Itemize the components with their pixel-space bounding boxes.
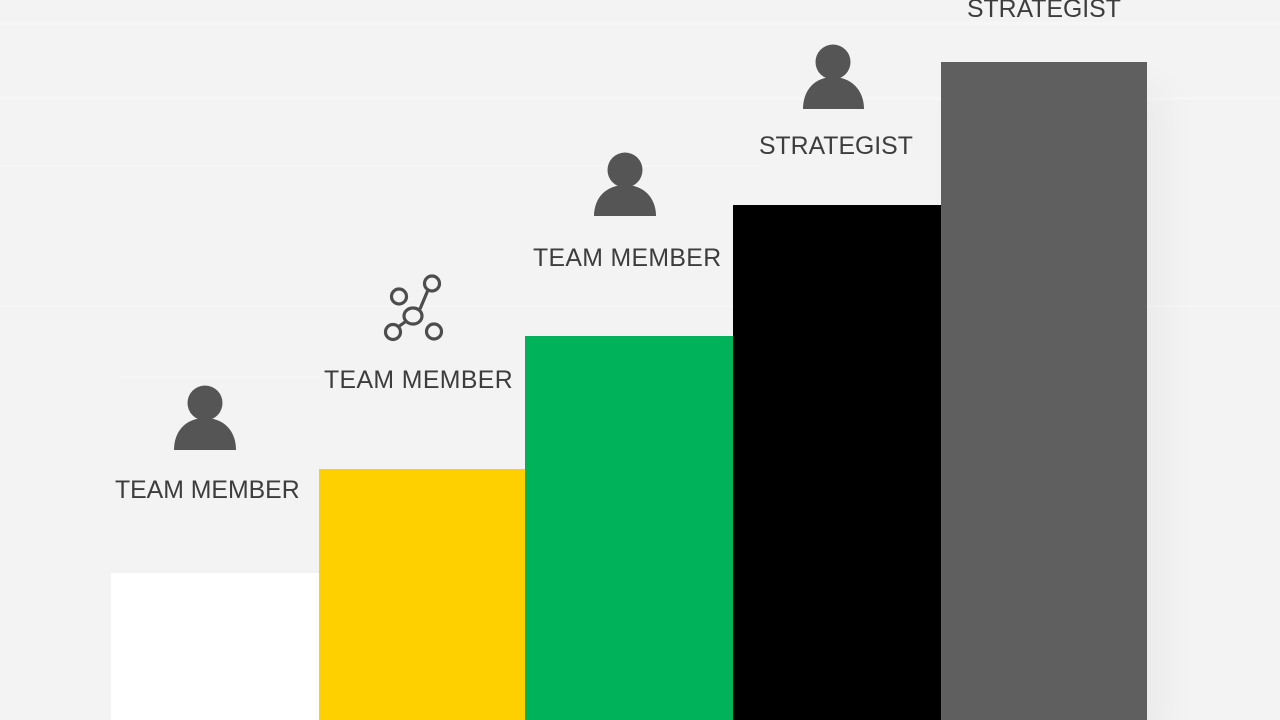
bar 4: black (733, 205, 941, 720)
bar 2: yellow (319, 469, 525, 720)
label: strategist 1: STRATEGIST (759, 133, 913, 160)
icon: person 1 (174, 386, 236, 450)
icon: network nodes (384, 274, 444, 342)
bar 1: white (111, 573, 319, 720)
label: team member 3: TEAM MEMBER (533, 245, 721, 272)
icon: person 2 (594, 152, 656, 216)
chart: rising bars (111, 62, 1147, 720)
label: team member 1: TEAM MEMBER (115, 477, 300, 504)
label: team member 2: TEAM MEMBER (324, 367, 513, 394)
icon: person 3 (803, 44, 864, 109)
bar 5: gray (941, 62, 1147, 720)
bar 3: green (525, 336, 733, 720)
